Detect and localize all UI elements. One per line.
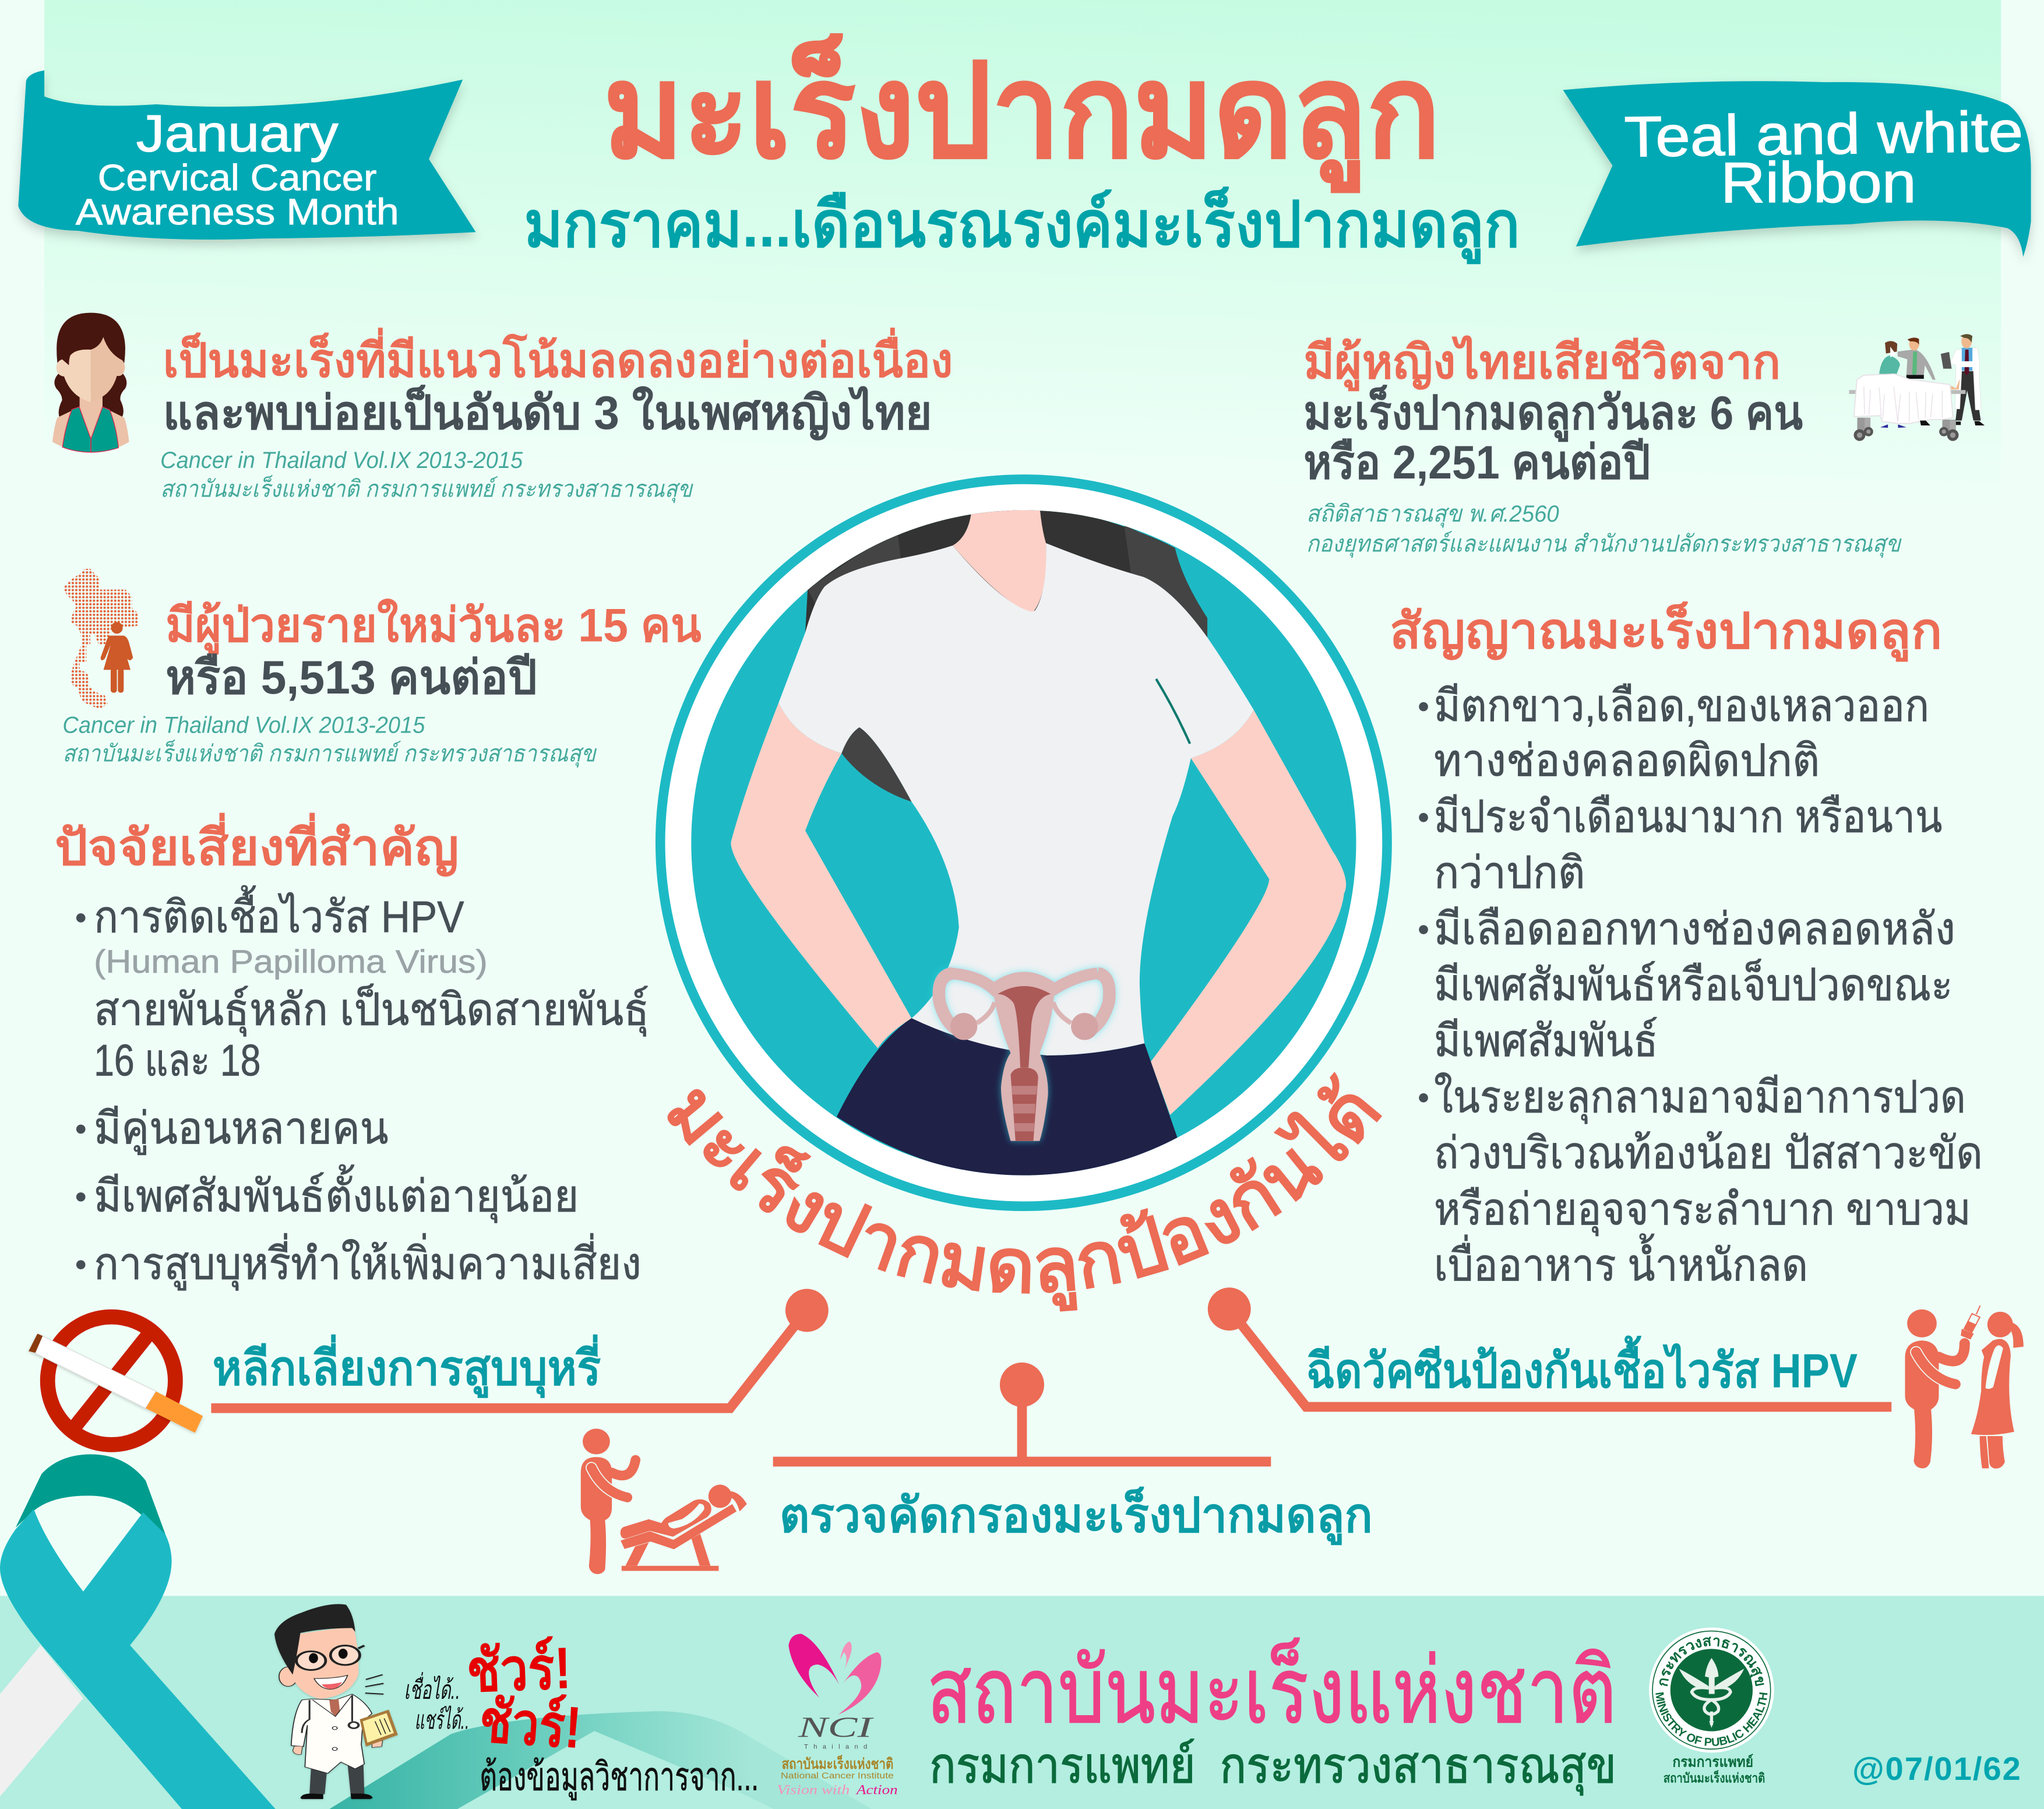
footer slogan: believe and share <box>404 1635 759 1801</box>
prevention: screening <box>581 1363 1373 1574</box>
seal caption: สถาบันมะเร็งแห่งชาติ <box>1664 1769 1765 1785</box>
text block: new patients per day: สถาบันมะเร็งแห่งชาติ กรมการแพทย์ กระทรวงสาธารณสุข <box>62 740 597 768</box>
text block: trend and rank: เป็นมะเร็งที่มีแนวโน้มลดลงอย่างต่อเนื่อง <box>163 328 953 388</box>
logo: Ministry of Public Health seal <box>1649 1627 1774 1753</box>
right banner: Teal and white Ribbon: Teal and white <box>1624 99 2024 169</box>
list: warning signs: มีเพศสัมพันธ์ <box>1434 1016 1658 1066</box>
icon: vaccination figures <box>1905 1305 2024 1469</box>
list: risk factors: (Human Papilloma Virus) <box>94 943 488 980</box>
footer slogan: believe and share: เชื่อได้.. <box>404 1672 460 1705</box>
panel: risk factors <box>55 812 649 1291</box>
list: risk factors: 16 และ 18 <box>94 1036 260 1086</box>
text block: deaths per day <box>1303 335 1902 558</box>
logo: Ministry of Public Health seal: กระทรวงสาธารณสุข <box>1659 1636 1764 1687</box>
list: risk factors: มีเพศสัมพันธ์ตั้งแต่อายุน้อย <box>94 1164 579 1223</box>
list: warning signs: กว่าปกติ <box>1434 849 1585 898</box>
illustration: woman torso in circle <box>656 474 1392 1211</box>
title: มะเร็งปากมดลูก <box>604 33 1440 192</box>
text block: trend and rank: และพบบ่อยเป็นอันดับ 3 ในเพศหญิงไทย <box>163 385 932 441</box>
list: warning signs: มีเลือดออกทางช่องคลอดหลัง <box>1434 905 1955 954</box>
logo: National Cancer Institute <box>777 1634 898 1797</box>
heading: warning signs: สัญญาณมะเร็งปากมดลูก <box>1390 601 1942 662</box>
text block: new patients per day: Cancer in Thailand Vol.IX 2013-2015 <box>62 712 425 738</box>
list: warning signs: หรือถ่ายอุจจาระลำบาก ขาบวม <box>1434 1185 1971 1236</box>
text block: deaths per day: มีผู้หญิงไทยเสียชีวิตจาก <box>1303 335 1781 392</box>
list: warning signs: มีตกขาว,เลือด,ของเหลวออก <box>1434 681 1929 731</box>
seal caption <box>1664 1753 1765 1785</box>
text block: trend and rank <box>160 328 953 503</box>
panel: warning signs <box>1390 601 1983 1290</box>
list: warning signs: มีประจำเดือนมามาก หรือนาน <box>1434 792 1942 842</box>
list: risk factors: การติดเชื้อไวรัส HPV <box>94 885 464 942</box>
list: warning signs: เบื่ออาหาร น้ำหนักลด <box>1434 1233 1808 1290</box>
prevention: HPV vaccine: ฉีดวัคซีนป้องกันเชื้อไวรัส HPV <box>1306 1335 1858 1398</box>
date stamp: @07/01/62 <box>1852 1750 2021 1787</box>
right banner: Teal and white Ribbon: Ribbon <box>1721 150 1916 214</box>
list: risk factors <box>76 885 649 1291</box>
text block: new patients per day <box>62 598 702 768</box>
text block: deaths per day: สถิติสาธารณสุข พ.ศ.2560 <box>1306 501 1559 528</box>
icon: no smoking <box>29 1317 203 1445</box>
list: risk factors: การสูบบุหรี่ทำให้เพิ่มความเสี่ยง <box>94 1233 642 1291</box>
right banner: Teal and white Ribbon <box>1563 81 2031 257</box>
icon: Thailand dotted map with woman <box>63 569 139 709</box>
list: warning signs: มีเพศสัมพันธ์หรือเจ็บปวดขณะ <box>1434 959 1953 1010</box>
footer band <box>0 1596 2044 1809</box>
icon: uterus <box>939 973 1109 1141</box>
icon: woman portrait <box>52 313 129 453</box>
text block: trend and rank: สถาบันมะเร็งแห่งชาติ กรมการแพทย์ กระทรวงสาธารณสุข <box>160 474 693 503</box>
prevention: screening: ตรวจคัดกรองมะเร็งปากมดลูก <box>780 1486 1373 1546</box>
icon: teal and white ribbon <box>0 1454 276 1809</box>
left banner: January Cervical Cancer Awareness Month: January <box>136 104 339 163</box>
logo: National Cancer Institute: Action <box>855 1782 898 1797</box>
icon: cartoon doctor <box>274 1604 398 1799</box>
footer slogan: believe and share: แชร์ได้.. <box>414 1705 469 1735</box>
logo: National Cancer Institute: สถาบันมะเร็งแห่งชาติ <box>782 1755 893 1772</box>
department and ministry: กรมการแพทย์ กระทรวงสาธารณสุข <box>929 1738 1616 1796</box>
logo: National Cancer Institute: NCI <box>797 1711 874 1743</box>
logo: National Cancer Institute: Vision with <box>777 1782 850 1797</box>
left banner: January Cervical Cancer Awareness Month <box>18 71 476 240</box>
institute name: สถาบันมะเร็งแห่งชาติ <box>927 1638 1616 1742</box>
list: warning signs <box>1419 681 1983 1290</box>
list: warning signs: ถ่วงบริเวณท้องน้อย ปัสสาวะขัด <box>1434 1129 1983 1178</box>
text block: deaths per day: หรือ 2,251 คนต่อปี <box>1303 437 1650 489</box>
icon: hospital bed scene <box>1849 334 1985 441</box>
text block: trend and rank: Cancer in Thailand Vol.IX 2013-2015 <box>160 447 523 473</box>
curved slogan: มะเร็งปากมดลูกป้องกันได้ <box>668 1072 1382 1311</box>
seal caption: กรมการแพทย์ <box>1672 1753 1753 1770</box>
footer slogan: believe and share: ชัวร์! <box>466 1635 572 1705</box>
prevention: avoid smoking <box>29 1289 829 1445</box>
text block: new patients per day: มีผู้ป่วยรายใหม่วันละ 15 คน <box>165 598 702 655</box>
icon: doctor and exam chair <box>581 1428 747 1574</box>
left banner: January Cervical Cancer Awareness Month: Cervical Cancer <box>98 158 377 199</box>
logo: National Cancer Institute: Thailand <box>804 1744 867 1751</box>
subtitle: มกราคม...เดือนรณรงค์มะเร็งปากมดลูก <box>524 186 1520 265</box>
list: warning signs: ในระยะลุกลามอาจมีอาการปวด <box>1434 1072 1966 1124</box>
footer slogan: believe and share: ต้องข้อมูลวิชาการจาก... <box>480 1755 759 1801</box>
logo: Ministry of Public Health seal: MINISTRY OF PUBLIC HEALTH <box>1655 1692 1768 1746</box>
text block: deaths per day: กองยุทธศาสตร์และแผนงาน สำนักงานปลัดกระทรวงสาธารณสุข <box>1306 530 1902 558</box>
list: risk factors: สายพันธุ์หลัก เป็นชนิดสายพันธุ์ <box>94 983 649 1036</box>
text block: deaths per day: มะเร็งปากมดลูกวันละ 6 คน <box>1303 385 1803 442</box>
left banner: January Cervical Cancer Awareness Month: Awareness Month <box>76 192 399 233</box>
list: warning signs: ทางช่องคลอดผิดปกติ <box>1434 736 1820 786</box>
footer hills <box>329 1711 872 1809</box>
prevention: HPV vaccine <box>1208 1287 2024 1469</box>
list: risk factors: มีคู่นอนหลายคน <box>94 1104 389 1155</box>
prevention: avoid smoking: หลีกเลี่ยงการสูบบุหรี่ <box>213 1334 601 1399</box>
logo: National Cancer Institute: National Cancer Institute <box>781 1772 894 1781</box>
heading: risk factors: ปัจจัยเสี่ยงที่สำคัญ <box>55 812 459 877</box>
footer slogan: believe and share: ชัวร์! <box>477 1688 583 1761</box>
text block: new patients per day: หรือ 5,513 คนต่อปี <box>165 652 537 704</box>
